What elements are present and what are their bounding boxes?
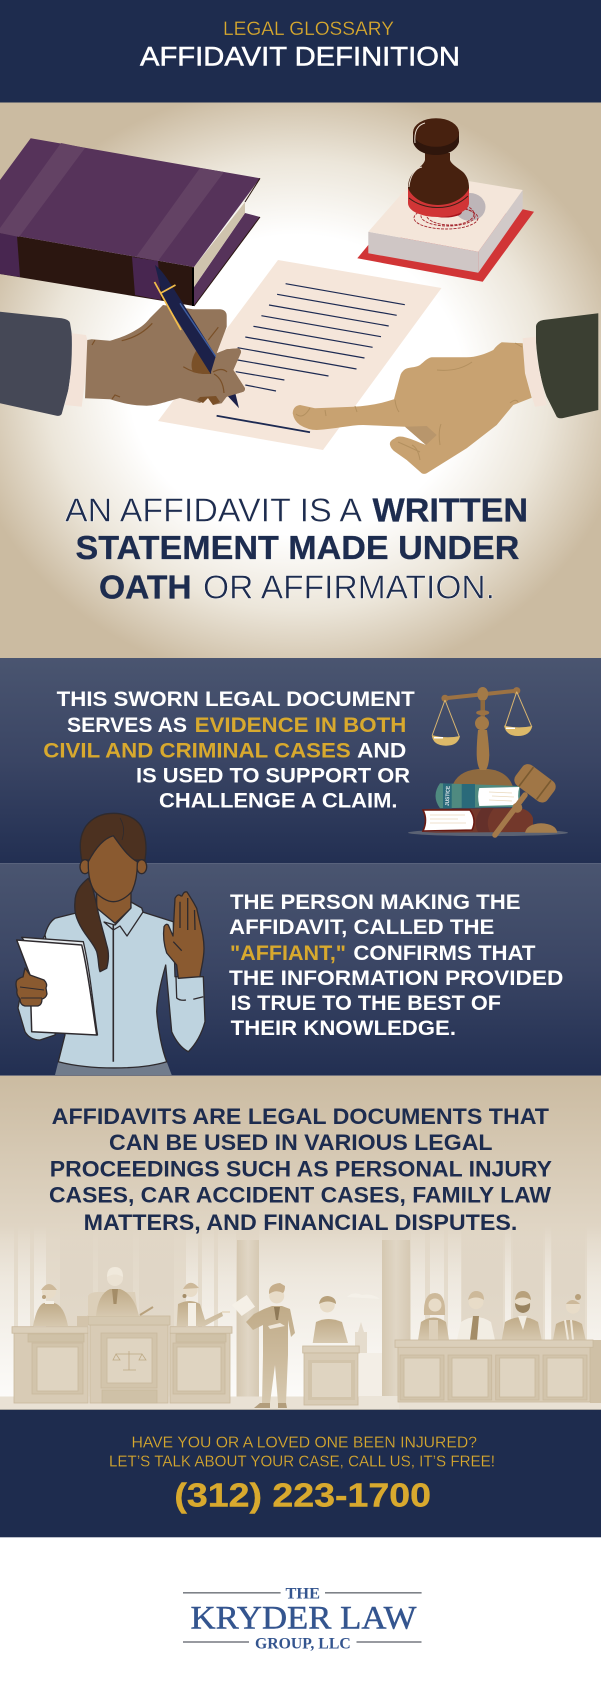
panel: call to action [0,1410,601,1537]
judges bench [12,1316,232,1403]
phone number: (312) 223-1700 [174,1477,431,1514]
illustration: woman raising hand holding paper [16,813,205,1075]
text block: affidavit statement [65,491,528,605]
red book [422,808,533,833]
panel: the affiant [0,863,601,1076]
text block: affiant: CONFIRMS THAT [353,942,536,965]
text block: affiant [229,891,563,1040]
text block: evidence: SERVES AS [67,714,187,737]
text block: affidavit statement: AN AFFIDAVIT IS A [65,491,362,528]
text block: affiant: THE PERSON MAKING THE [230,891,520,914]
witness stand [303,1296,359,1405]
illustration: courtroom scene [0,1225,601,1410]
panel: sworn legal document [0,658,601,863]
court clerk [177,1283,230,1326]
text: free call invitation: LET’S TALK ABOUT YOUR CASE, CALL US, IT’S FREE! [109,1454,495,1471]
text block: affidavit statement: WRITTEN [372,491,528,528]
jury [418,1291,586,1340]
text block: legal proceedings [49,1104,552,1235]
text block: legal proceedings: MATTERS, AND FINANCIAL DISPUTES. [84,1210,517,1235]
text block: affiant: THE INFORMATION PROVIDED [229,967,563,990]
text block: legal proceedings: AFFIDAVITS ARE LEGAL DOCUMENTS THAT [52,1104,549,1129]
logo: the kryder law group [183,1585,422,1652]
text block: affidavit statement: OR AFFIRMATION. [203,568,495,605]
text block: legal proceedings: CAN BE USED IN VARIOUS LEGAL [109,1130,493,1155]
text block: evidence [43,688,415,812]
icon: document with signature line [158,260,442,450]
text block: affiant: AFFIDAVIT, CALLED THE [229,916,494,939]
panel: legal proceedings [0,1076,601,1410]
judge left [33,1284,68,1326]
gavel [495,761,558,835]
logo: the kryder law group: KRYDER LAW [190,1600,417,1636]
text block: evidence: IS USED TO SUPPORT OR [136,764,410,787]
logo: the kryder law group: THE [286,1585,320,1602]
text block: affidavit statement: OATH [99,568,192,605]
text block: evidence: CIVIL AND CRIMINAL CASES [43,739,351,762]
judge center [88,1267,153,1316]
courtroom curtains and columns [0,1225,601,1410]
text block: affiant: IS TRUE TO THE BEST OF [231,992,501,1015]
text block: affiant: "AFFIANT," [230,942,346,965]
icon: left hand signing with pen [0,265,245,416]
text block: legal proceedings: PROCEEDINGS SUCH AS PERSONAL INJURY [50,1157,552,1182]
teal book [436,783,520,808]
teal book: JUSTICE [445,786,452,806]
text block: evidence: CHALLENGE A CLAIM. [159,789,398,812]
icon: scales of justice with books and gavel [408,687,568,836]
title: AFFIDAVIT DEFINITION [140,42,460,72]
logo: the kryder law group: GROUP, LLC [255,1635,351,1652]
header band [0,0,601,102]
text block: affidavit statement: STATEMENT MADE UNDER [76,529,520,566]
lawyer standing [232,1283,295,1408]
jury box [395,1340,601,1403]
icon: stacked books [0,138,260,306]
icon: stamp on pad [357,118,534,282]
text block: legal proceedings: CASES, CAR ACCIDENT CASES, FAMILY LAW [49,1183,552,1208]
text block: evidence: AND [357,739,406,762]
text: injured question: HAVE YOU OR A LOVED ONE BEEN INJURED? [132,1434,477,1451]
icon: right hand pointing [293,313,598,474]
text block: evidence: EVIDENCE IN BOTH [195,714,406,737]
panel: hero illustration [0,102,601,658]
eyebrow: legal glossary: LEGAL GLOSSARY [223,18,394,40]
text block: affiant: THEIR KNOWLEDGE. [231,1017,456,1040]
text block: evidence: THIS SWORN LEGAL DOCUMENT [57,688,415,711]
scale beam and column [432,687,532,787]
